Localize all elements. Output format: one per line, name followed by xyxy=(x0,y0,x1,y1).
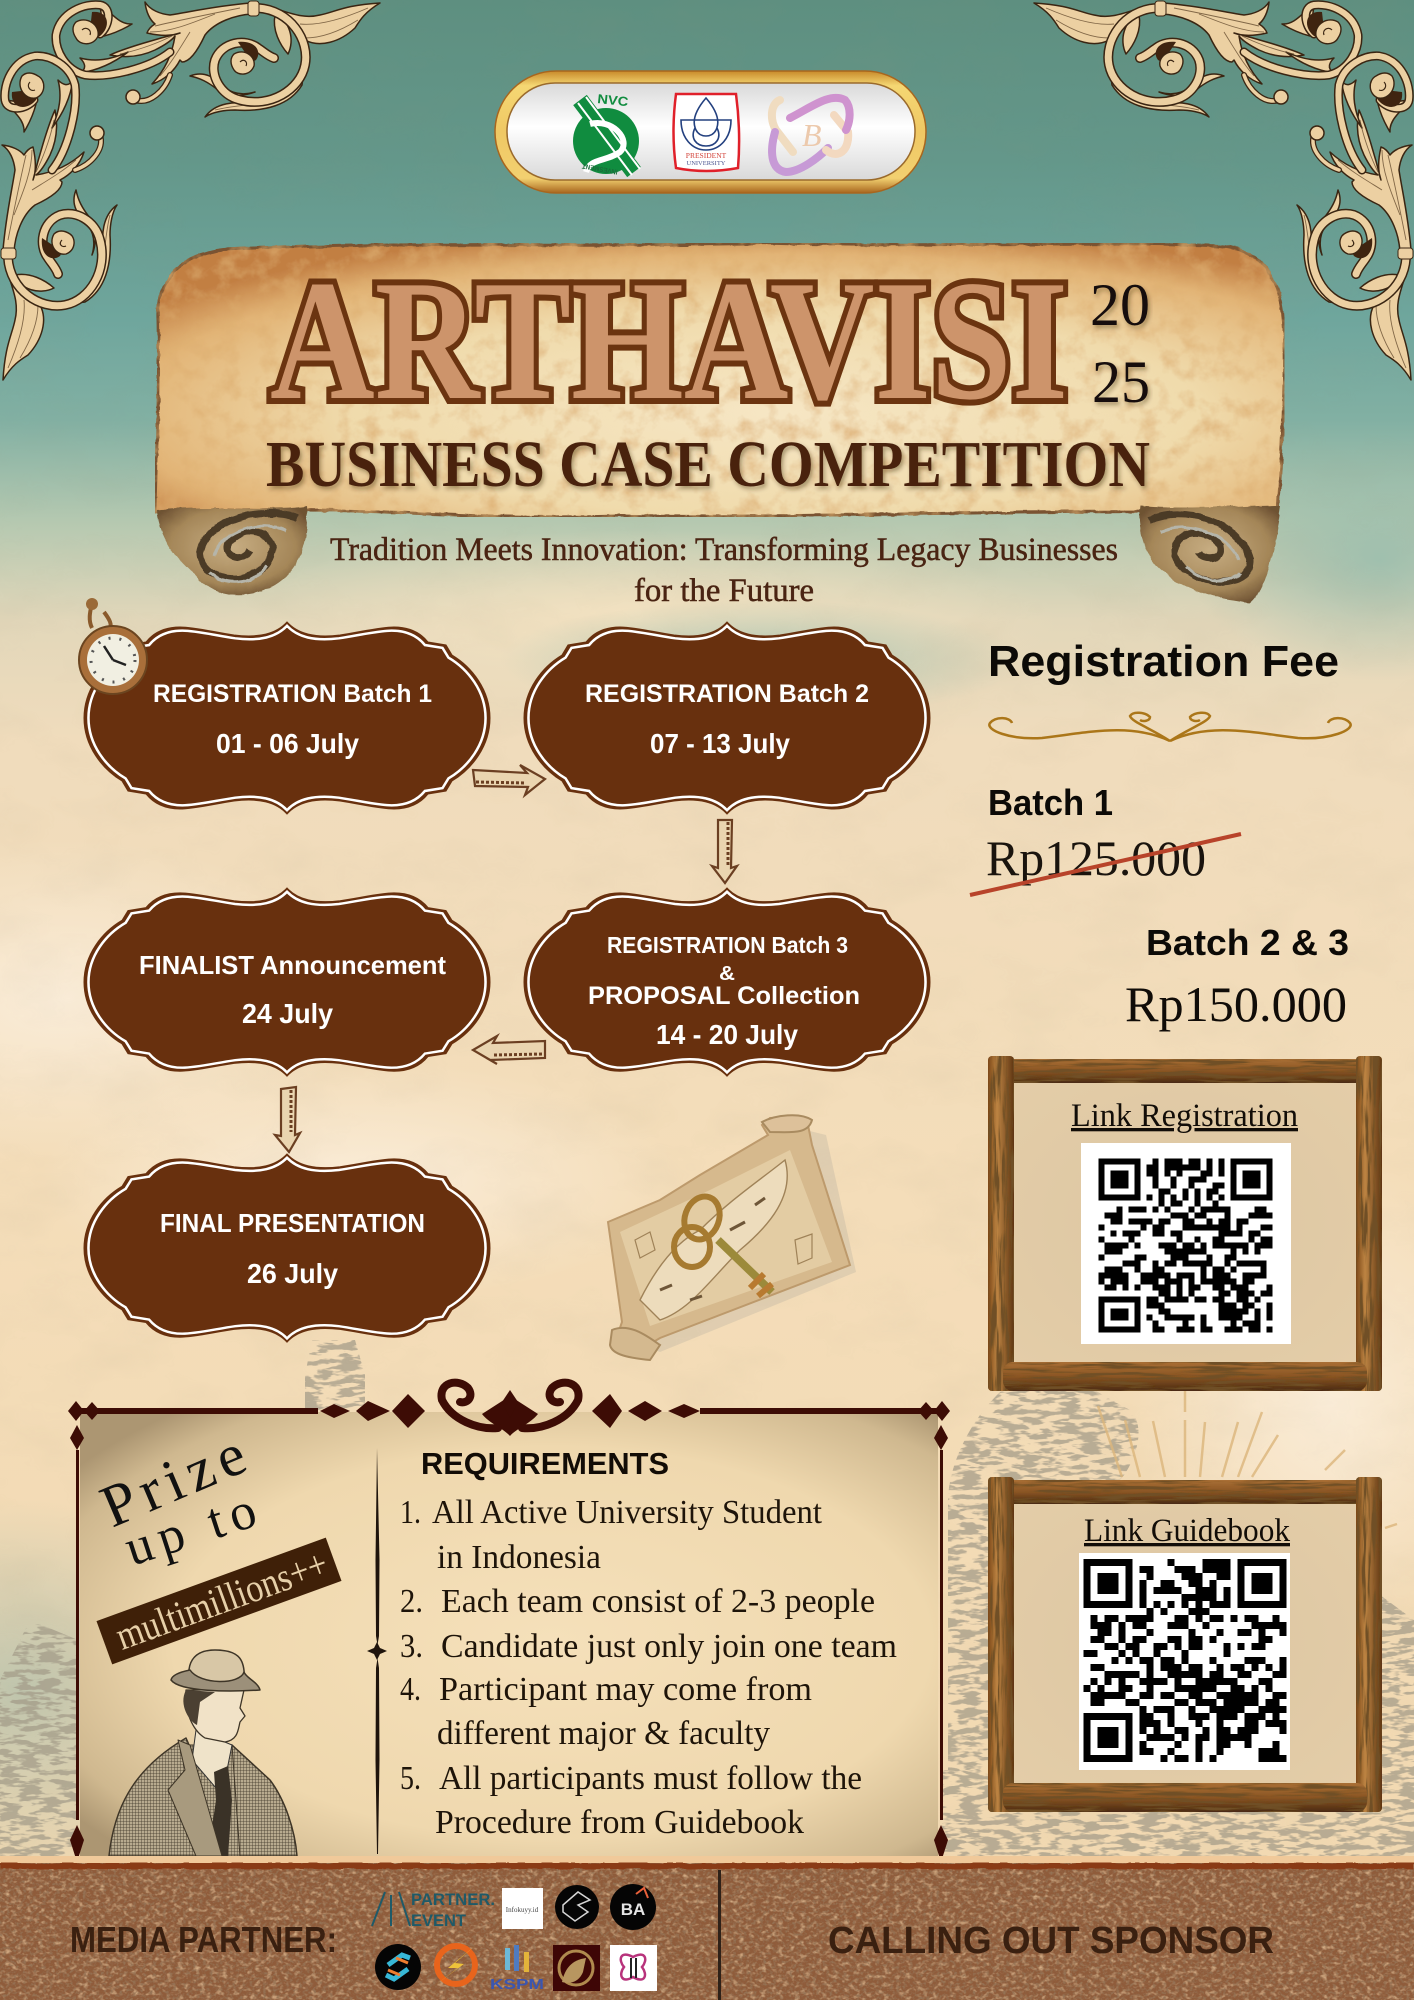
media partner label: MEDIA PARTNER: xyxy=(70,1919,337,1960)
requirements list: 5. xyxy=(400,1760,421,1797)
year 2025 xyxy=(1090,272,1150,415)
divider with star xyxy=(367,1448,387,1854)
subtitle: BUSINESS CASE COMPETITION xyxy=(266,428,1150,501)
arrow left xyxy=(473,1036,545,1064)
timeline box: registration batch 2 xyxy=(524,622,930,814)
flourish divider xyxy=(989,713,1351,741)
batch 1 price: Batch 1 xyxy=(988,782,1113,823)
logo: President University: UNIVERSITY xyxy=(686,160,726,167)
timeline box: registration batch 3 and proposal xyxy=(524,888,930,1076)
registration fee heading: Registration Fee xyxy=(988,637,1339,686)
timeline box: registration batch 1: 01 - 06 July xyxy=(216,728,359,759)
timeline box: registration batch 3 and proposal: & xyxy=(719,963,735,985)
logo: BA: BA xyxy=(621,1900,645,1919)
requirements list: All participants must follow the xyxy=(439,1760,862,1797)
building silhouettes xyxy=(0,1340,1414,1860)
logo: BA xyxy=(610,1884,656,1930)
timeline box: registration batch 3 and proposal: REGISTRATION Batch 3 xyxy=(607,932,848,958)
logo: NVC xyxy=(573,91,640,175)
logo: President University: PRESIDENT xyxy=(686,151,727,160)
requirements list: Each team consist of 2-3 people xyxy=(441,1583,875,1620)
sunburst rays xyxy=(1017,1388,1397,1534)
logo: KSPM xyxy=(490,1945,544,1993)
timeline box: finalist announcement xyxy=(84,888,490,1076)
logo pill xyxy=(495,71,926,193)
arrow down batch 2 to 3 xyxy=(712,820,737,883)
logo: butterfly white xyxy=(610,1945,657,1991)
prize heading: up to xyxy=(118,1482,263,1577)
timeline box: finalist announcement: FINALIST Announcement xyxy=(139,950,446,980)
tagline xyxy=(330,532,1118,609)
logo: infokuy: Infokuyy.id xyxy=(506,1906,539,1914)
requirements list: Candidate just only join one team xyxy=(441,1628,897,1665)
requirements list: 4. xyxy=(400,1671,421,1708)
year 2025: 20 xyxy=(1090,272,1150,338)
registration QR frame xyxy=(988,1056,1382,1391)
key xyxy=(674,1192,772,1296)
scroll paper xyxy=(155,243,1284,517)
panel: prize and requirements xyxy=(68,1383,950,1862)
footer band xyxy=(0,1856,1414,2000)
logo: B: B xyxy=(802,117,822,153)
illustration: gentleman with hat xyxy=(109,1650,297,1856)
requirements list: All Active University Student xyxy=(432,1494,823,1531)
guidebook QR frame xyxy=(988,1477,1382,1812)
logo: black circle E xyxy=(555,1885,599,1929)
batch 1 price: Rp125.000 xyxy=(986,830,1206,886)
logo: wolf emblem xyxy=(553,1945,600,1991)
timeline box: registration batch 1 xyxy=(84,622,490,814)
requirements list: 2. xyxy=(400,1583,423,1620)
tagline: for the Future xyxy=(634,573,814,609)
timeline box: registration batch 2: 07 - 13 July xyxy=(650,728,790,759)
requirements list: 3. xyxy=(400,1628,423,1665)
timeline box: registration batch 3 and proposal: 14 - 20 July xyxy=(656,1019,798,1050)
timeline box: finalist announcement: 24 July xyxy=(242,998,333,1029)
timeline box: final presentation: FINAL PRESENTATION xyxy=(160,1208,425,1238)
timeline box: registration batch 3 and proposal: PROPOSAL Collection xyxy=(588,982,860,1010)
requirements list: Participant may come from xyxy=(439,1671,812,1708)
batch 1 price xyxy=(970,782,1241,895)
title ARTHAVISI: ARTHAVISI xyxy=(270,246,1068,436)
logo: President University xyxy=(674,94,739,171)
requirements list: different major & faculty xyxy=(437,1715,770,1752)
batch 2 and 3 price xyxy=(1125,922,1349,1032)
requirements heading: REQUIREMENTS xyxy=(421,1446,669,1481)
panel border ornament xyxy=(68,1383,950,1862)
timeline box: final presentation xyxy=(84,1154,490,1342)
logo: partner event xyxy=(372,1890,495,1930)
arrow down finalist to final xyxy=(275,1087,300,1152)
corner ornament left xyxy=(1,1,380,380)
logo: partner event: PARTNER. xyxy=(411,1890,495,1909)
logo: partner event: EVENT xyxy=(411,1911,467,1930)
logo: infokuy xyxy=(502,1888,543,1929)
icon: pocket watch xyxy=(79,598,147,694)
requirements list: Procedure from Guidebook xyxy=(435,1804,804,1841)
scroll curl left xyxy=(157,506,308,595)
requirements list: 1. xyxy=(400,1494,421,1531)
year 2025: 25 xyxy=(1092,349,1150,415)
logo: NVC: INVESMENT xyxy=(581,162,618,175)
link guidebook label: Link Guidebook xyxy=(1084,1513,1290,1549)
logo: cyan orange circle xyxy=(375,1944,421,1990)
batch 2 and 3 price: Rp150.000 xyxy=(1125,976,1347,1032)
requirements list: in Indonesia xyxy=(437,1539,601,1576)
illustration: treasure map and key xyxy=(608,1115,856,1360)
parchment scroll banner xyxy=(155,243,1284,603)
corner ornament right xyxy=(1034,1,1413,380)
QR code: registration xyxy=(1081,1143,1291,1344)
timeline box: registration batch 2: REGISTRATION Batch 2 xyxy=(585,680,869,708)
requirements list xyxy=(400,1494,897,1841)
logo: NVC: NVC xyxy=(597,91,630,109)
timeline box: final presentation: 26 July xyxy=(247,1258,338,1289)
timeline box: registration batch 1: REGISTRATION Batch 1 xyxy=(153,680,432,708)
multimillions banner: multimillions++ xyxy=(110,1540,334,1659)
logo: orange gear lightning xyxy=(434,1945,476,1986)
arrow right xyxy=(473,765,545,795)
link registration label: Link Registration xyxy=(1071,1098,1298,1134)
QR code: guidebook xyxy=(1079,1553,1290,1770)
logo: KSPM: KSPM xyxy=(490,1976,544,1993)
batch 2 and 3 price: Batch 2 & 3 xyxy=(1146,922,1349,963)
logo: B xyxy=(772,98,850,172)
tagline: Tradition Meets Innovation: Transforming Legacy Businesses xyxy=(330,532,1118,568)
prize heading: Prize xyxy=(91,1421,255,1540)
scroll curl right xyxy=(1139,505,1281,603)
media partner logos xyxy=(372,1884,657,1993)
calling out sponsor: CALLING OUT SPONSOR xyxy=(828,1920,1274,1962)
